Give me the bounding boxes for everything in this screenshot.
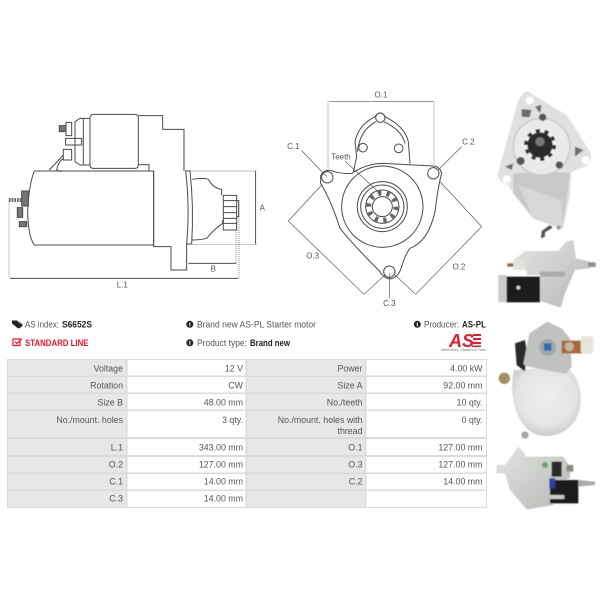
table values: left column: 127.00 mm [199,459,243,470]
terminals [49,122,82,170]
icon: info [186,339,193,346]
table values: left column: 343.00 mm [199,442,243,453]
pinion teeth [369,193,396,220]
table values: left column: 14.00 mm [204,493,243,504]
info: product type [186,338,291,349]
table values: left column: CW [228,380,243,391]
table labels: right column: O.3 [348,459,362,470]
info: producer: Producer: [424,320,459,330]
dimension labels: B [211,265,216,274]
front view labels: Teeth [331,153,351,162]
table labels: left column: L.1 [111,442,123,453]
table values: right column: 92.00 mm [443,380,483,391]
info: AS index: AS index: [25,320,59,330]
table labels: left column: Size B [98,397,123,408]
table labels: left column [56,363,123,504]
table values: right column: 10 qty. [457,397,482,408]
table values: right column: 14.00 mm [443,476,483,487]
table background [7,359,487,508]
drive housing [57,116,187,270]
table values: right column: 0 qty. [462,415,482,425]
pinion [223,195,239,230]
table labels: right column: No./teeth [327,397,362,408]
front view labels: C.3 [383,299,396,308]
dimension labels [117,204,266,289]
table values: left column: 14.00 mm [204,476,243,487]
product photos, bottom [497,322,595,509]
table values: right column: 127.00 mm [438,442,483,453]
specification table [7,359,487,508]
info: standard line: STANDARD LINE [25,338,88,348]
nose [186,171,223,244]
photo: starter front [498,92,591,238]
icon: info [414,321,421,328]
info: product type: Brand new [250,338,291,349]
photo: starter side [498,240,596,308]
table labels: right column: C.2 [349,476,362,487]
dimension labels: L.1 [117,280,128,289]
logo: AS-PL [441,331,486,352]
front view labels: C.2 [462,137,475,146]
front view labels: O.3 [306,252,320,261]
table labels: right column: thread [337,426,362,436]
concentric rings [342,166,423,247]
table values: left column: 3 qty. [222,415,243,425]
photo: starter rear [499,322,593,439]
table values: right column: 4.00 kW [450,363,483,374]
table values: left column [199,363,244,504]
side view technical drawing [9,114,266,289]
mounting holes [376,113,385,122]
icon: tags [12,320,23,328]
front view labels: O.1 [375,91,388,100]
front view labels: C.1 [287,142,300,151]
table values: left column: 12 V [225,363,244,374]
table labels: left column: Rotation [90,380,123,391]
table labels: right column [278,363,363,487]
front view labels: O.2 [453,262,466,271]
solenoid [75,114,138,168]
product photos, top [498,92,596,308]
table values: left column: 48.00 mm [204,397,243,408]
photo: starter side rear [497,447,595,509]
table labels: left column: No./mount. holes [56,415,123,425]
flange outline [321,163,442,279]
table labels: left column: C.1 [109,476,123,487]
icon: info [186,321,193,328]
info: description: Brand new AS-PL Starter motor [197,320,316,330]
upper boss [353,113,410,172]
dimension labels: A [260,204,266,213]
info: product type: Product type: [197,338,247,349]
info: AS index [12,320,92,330]
logo: AS-PL: AS [448,331,474,351]
front view labels [287,91,475,308]
info: producer [414,320,486,330]
table values: right column [438,363,483,487]
info: AS index: S6652S [62,320,92,330]
dimension lines [9,171,257,278]
front view technical drawing [287,91,482,308]
table labels: right column: Power [337,363,362,374]
table labels: left column: C.3 [109,493,123,504]
table labels: left column: O.2 [109,459,123,470]
table values: right column: 127.00 mm [438,459,483,470]
table labels: right column: Size A [337,380,363,391]
icon: check square [13,338,22,346]
table labels: right column: O.1 [348,442,362,453]
table labels: left column: Voltage [94,363,123,374]
motor body [28,171,154,245]
table labels: right column: No./mount. holes with [278,415,362,425]
logo: AS-PL: Alternators, Starters & Parts [441,348,486,352]
dimensions [288,101,482,298]
info: producer: AS-PL [462,320,486,330]
